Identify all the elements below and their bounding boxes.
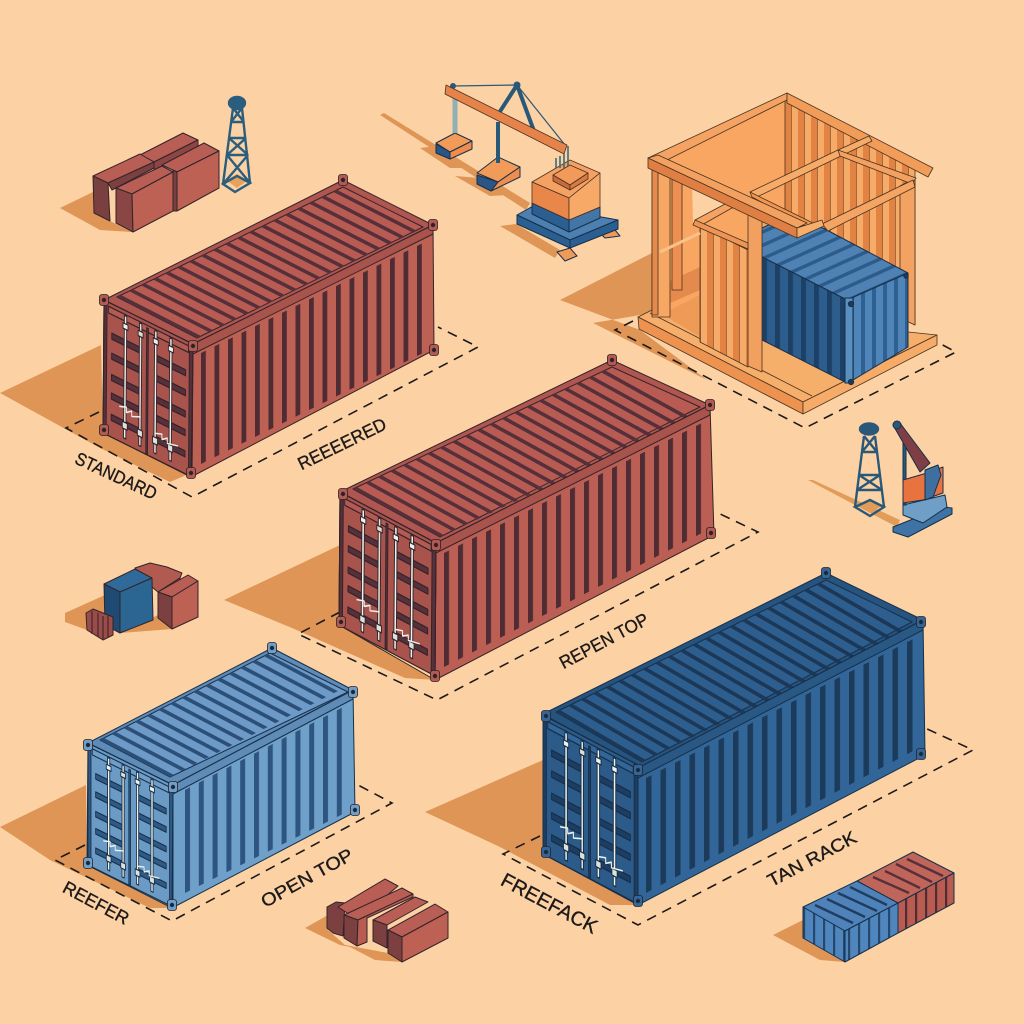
rack deck xyxy=(638,293,937,414)
crane beam xyxy=(445,85,567,154)
label: REEEERED: REEEERED xyxy=(294,414,390,474)
door end xyxy=(339,492,436,676)
roof xyxy=(104,180,433,344)
corner castings xyxy=(338,488,348,500)
crane suspended block left xyxy=(436,133,472,159)
rack back wall xyxy=(660,100,785,315)
crane rods and mast xyxy=(450,82,565,163)
label: REPEN TOP: REPEN TOP xyxy=(556,609,652,673)
mini blue container xyxy=(803,881,898,962)
container: middle red xyxy=(336,354,716,682)
center crane xyxy=(380,82,620,261)
rack right wall slats xyxy=(785,100,915,325)
label: FREEFACK: FREEFACK xyxy=(497,869,602,939)
corner castings xyxy=(100,294,108,306)
ground shadows xyxy=(0,192,845,962)
tower lattice xyxy=(855,424,884,516)
rack opening xyxy=(692,183,730,223)
label: TAN RACK: TAN RACK xyxy=(764,827,860,891)
door end xyxy=(103,300,193,477)
rack frame with blue container xyxy=(638,93,937,414)
rack roof beams xyxy=(648,93,933,249)
mini red container xyxy=(857,852,954,933)
top-left red boxes xyxy=(93,133,219,232)
label: REEFER: REEFER xyxy=(60,877,132,929)
corner castings xyxy=(542,710,550,722)
left mixed cargo stack xyxy=(86,563,198,640)
roof xyxy=(543,573,923,768)
long side xyxy=(191,225,434,477)
right small crane xyxy=(893,421,952,537)
dashed footprint: light blue container xyxy=(55,785,392,921)
rack lower left slats xyxy=(670,267,700,303)
bottom red blocks xyxy=(327,879,448,962)
icon: lattice tower top-left xyxy=(223,97,250,192)
crane main base xyxy=(517,203,620,261)
crane cables xyxy=(556,146,568,168)
label: STANDARD: STANDARD xyxy=(72,448,160,504)
blue container roof xyxy=(762,222,908,300)
blue container end xyxy=(847,273,908,383)
blue container long side xyxy=(762,257,847,383)
door end xyxy=(543,715,638,904)
rack right rear column xyxy=(900,178,915,325)
long side xyxy=(435,405,714,680)
crane shadows xyxy=(380,113,560,258)
dashed footprint: middle container xyxy=(298,512,758,700)
bottom right mini containers xyxy=(803,852,954,962)
corner castings xyxy=(84,740,92,750)
container: light blue xyxy=(84,642,360,910)
roof xyxy=(88,648,353,785)
crane suspended block right xyxy=(477,157,520,191)
roof xyxy=(340,360,710,543)
door end xyxy=(88,743,173,907)
long side xyxy=(638,620,925,905)
dashed footprint: navy container xyxy=(503,728,973,925)
rack columns and front slats xyxy=(652,165,762,372)
container: standard red xyxy=(100,174,438,478)
blue container inside rack xyxy=(762,222,908,385)
right lattice tower with shadow xyxy=(808,424,900,527)
tower shadow xyxy=(808,480,900,527)
crane main block xyxy=(532,160,600,220)
long side xyxy=(172,690,355,908)
container: navy xyxy=(542,568,926,906)
dashed footprint: standard container xyxy=(66,327,478,497)
dashed footprint: rack xyxy=(615,321,956,428)
label: OPEN TOP: OPEN TOP xyxy=(258,845,356,911)
